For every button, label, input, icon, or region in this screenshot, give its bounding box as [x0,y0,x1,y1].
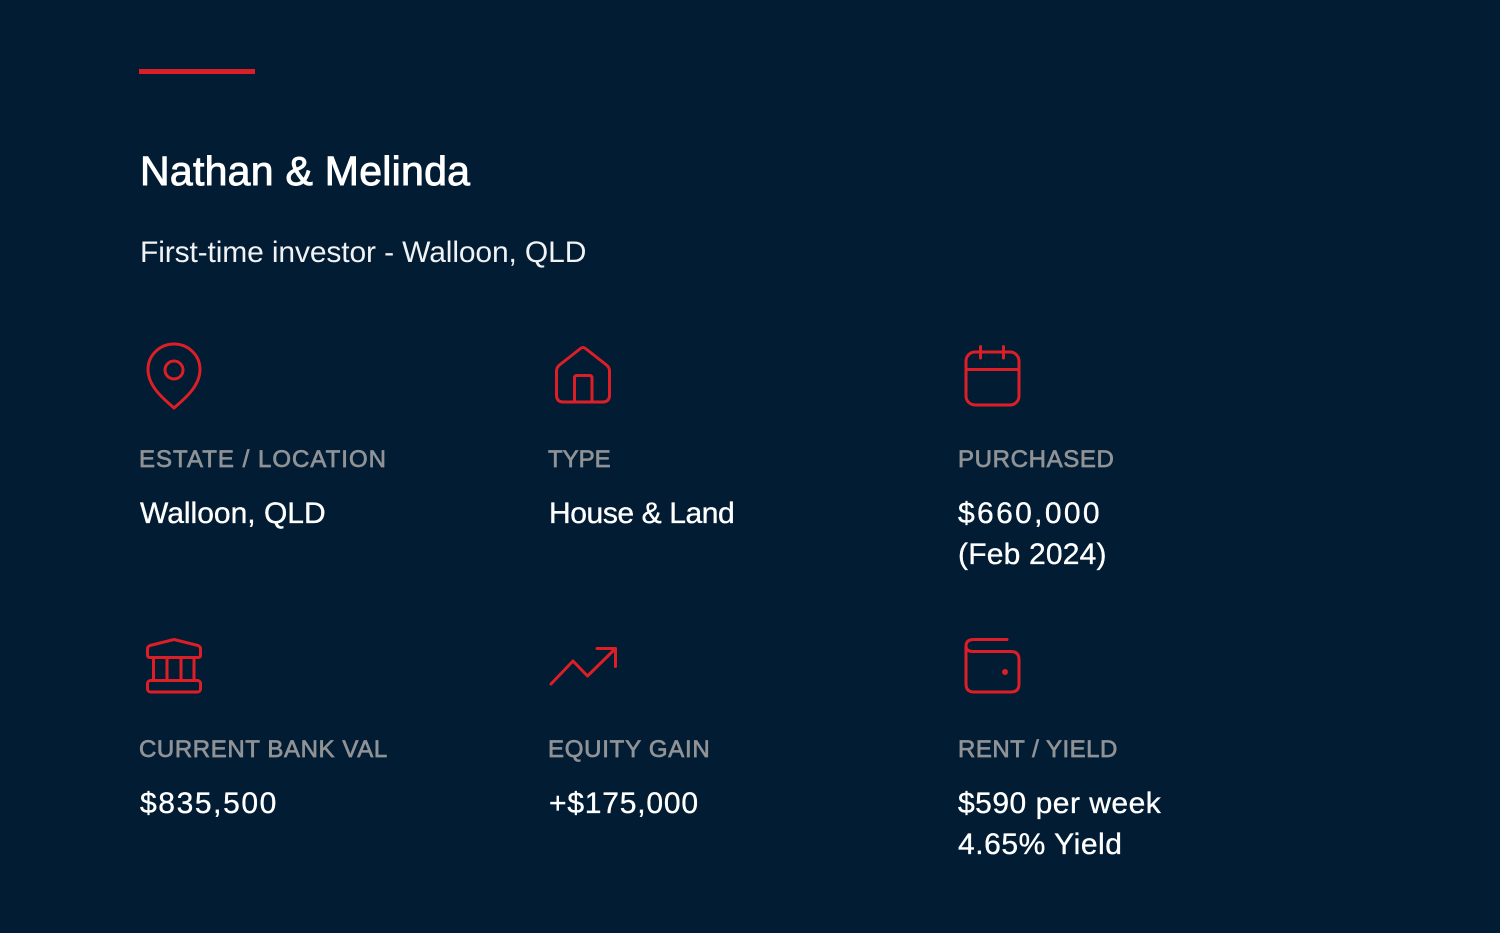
icon: trend arrow [549,646,618,686]
icon: calendar [964,345,1020,406]
label: rent: RENT / YIELD [958,736,1118,763]
value: purchased: $660,000 [958,497,1102,530]
label: purchased: PURCHASED [958,446,1115,473]
value: bank val: $835,500 [140,787,278,820]
equity cell [548,736,711,820]
label: type: TYPE [548,446,611,473]
title: Nathan & Melinda [140,148,470,194]
bank value cell [139,736,388,820]
subtitle: First-time investor - Walloon, QLD [140,236,586,269]
icon: location pin [146,342,202,410]
value: equity: +$175,000 [549,787,699,820]
label: bank val: CURRENT BANK VAL [139,736,388,763]
type cell [548,446,734,530]
purchased cell [958,446,1115,571]
icon: wallet [964,638,1020,694]
icon: bank [146,638,202,694]
value: purchased: (Feb 2024) [958,538,1107,571]
value: type: House & Land [549,497,734,530]
value: rent: $590 per week [958,787,1161,820]
value: rent: 4.65% Yield [958,828,1123,861]
value: rent [958,787,1162,861]
location cell [139,446,387,530]
value: estate: Walloon, QLD [140,497,326,530]
label: equity: EQUITY GAIN [548,736,711,763]
red accent bar [139,69,255,74]
rent cell [958,736,1162,861]
icon: house [555,346,611,404]
value: purchased [958,497,1107,571]
label: estate: ESTATE / LOCATION [139,446,387,473]
